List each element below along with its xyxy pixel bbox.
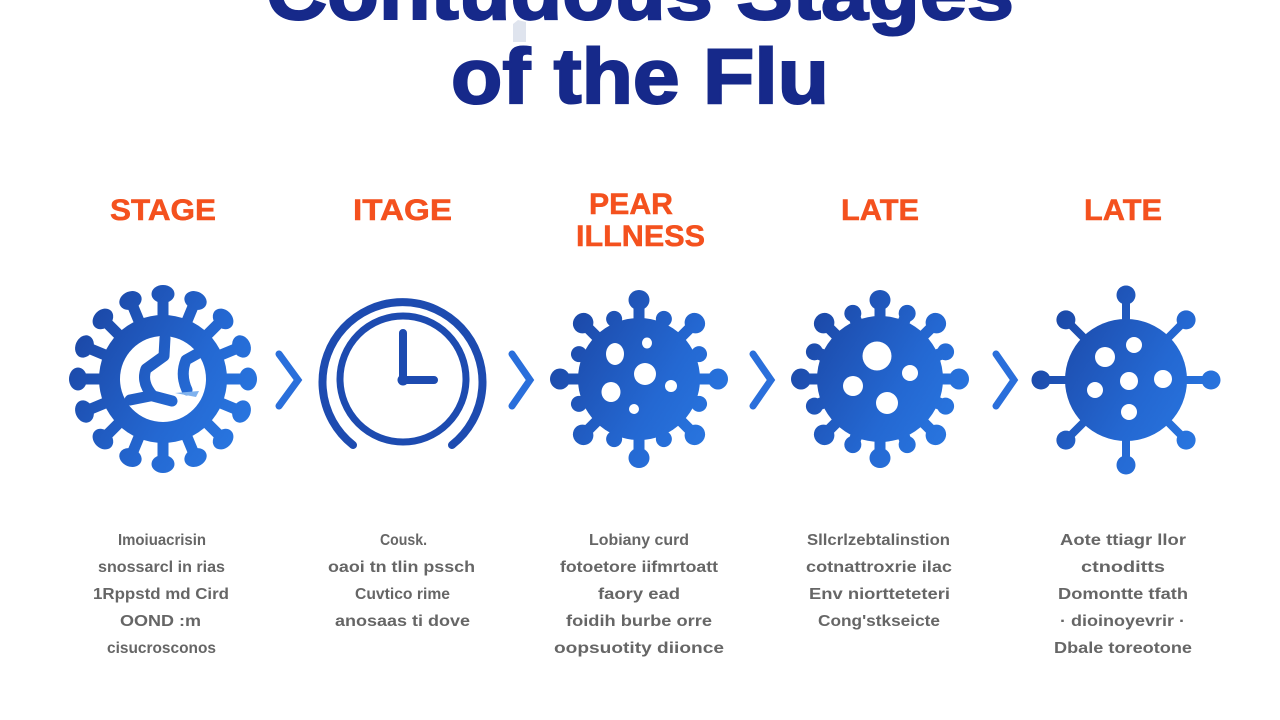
text block: stage 3 description: oopsuotity diionce — [554, 640, 724, 657]
text block: stage 5 description: · dioinoyevrir · — [1060, 613, 1185, 630]
text block: stage 3 description — [554, 532, 724, 657]
arrow: stage 4 to 5 — [996, 354, 1014, 406]
text block: stage 5 description: Dbale toreotone — [1054, 640, 1192, 657]
text block: stage 5 description: ctnoditts — [1081, 559, 1165, 576]
arrow: stage 3 to 4 — [753, 354, 771, 406]
text block: stage 3 description: Lobiany curd — [589, 532, 689, 549]
text block: stage 2 description — [328, 532, 475, 630]
text block: stage 5 description: Aote ttiagr llor — [1060, 532, 1186, 549]
text block: stage 1 description: 1Rppstd md Cird — [93, 586, 229, 603]
title artifact — [513, 20, 526, 42]
text block: stage 3 description: fotoetore iifmrtoatt — [560, 559, 719, 576]
title line 2: of the Flu — [451, 32, 829, 120]
text block: stage 4 description — [806, 532, 952, 630]
panel: stage 3 — [550, 193, 728, 656]
text block: stage 5 description: Domontte tfath — [1058, 586, 1188, 603]
text block: stage 4 description: Sllcrlzebtalinstion — [807, 532, 950, 549]
text block: stage 3 description: faory ead — [598, 586, 680, 603]
text block: stage 1 description: Imoiuacrisin — [118, 532, 206, 549]
text block: stage 1 description: snossarcl in rias — [98, 559, 225, 576]
text block: stage 1 description: cisucrosconos — [107, 640, 216, 657]
panel: stage 1 — [69, 199, 257, 653]
icon: virus with large holes — [791, 290, 969, 468]
heading: peak illness: PEAR — [589, 188, 673, 221]
icon: virus with mixed spikes — [550, 290, 728, 468]
text block: stage 4 description: Cong'stkseicte — [818, 613, 940, 630]
text block: stage 4 description: Env niortteteteri — [809, 586, 950, 603]
icon: virus with eight spikes — [1032, 286, 1220, 474]
panel: stage 4 — [791, 199, 969, 630]
heading: stage: STAGE — [110, 194, 216, 227]
text block: stage 2 description: Cousk. — [380, 532, 427, 549]
text block: stage 2 description: Cuvtico rime — [355, 586, 450, 603]
text block: stage 2 description: oaoi tn tlin pssch — [328, 559, 475, 576]
heading: late: LATE — [1084, 194, 1162, 227]
heading: itage: ITAGE — [353, 194, 452, 227]
text block: stage 1 description: OOND :m — [120, 613, 201, 630]
title — [266, 0, 1014, 120]
text block: stage 4 description: cotnattroxrie ilac — [806, 559, 952, 576]
panel: stage 2 — [323, 194, 482, 630]
heading: late: LATE — [841, 194, 919, 227]
panel: stage 5 — [1025, 194, 1227, 657]
text block: stage 2 description: anosaas ti dove — [335, 613, 470, 630]
heading: peak illness — [576, 188, 705, 253]
heading: peak illness: ILLNESS — [576, 220, 705, 253]
icon: clock — [323, 302, 482, 445]
icon: virus with swirl core — [69, 285, 257, 473]
text block: stage 3 description: foidih burbe orre — [566, 613, 712, 630]
text block: stage 1 description — [93, 532, 229, 657]
arrow: stage 2 to 3 — [512, 354, 530, 406]
text block: stage 5 description — [1054, 532, 1192, 657]
arrow: stage 1 to 2 — [279, 354, 298, 406]
